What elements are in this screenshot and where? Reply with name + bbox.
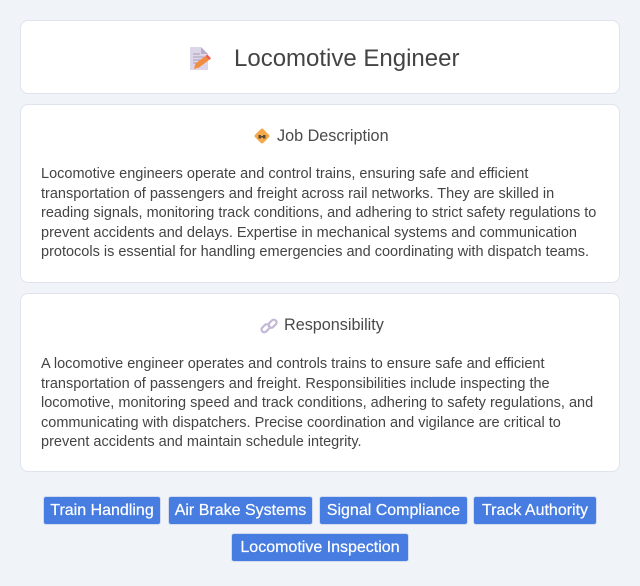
- text block: responsibility: transportation of passengers and freight. Responsibilities include inspecting the: [41, 376, 550, 392]
- heading: job description: Job Description: [277, 127, 389, 145]
- title: Locomotive Engineer: [234, 45, 459, 72]
- tag: locomotive inspection: Locomotive Inspection: [240, 539, 400, 556]
- text block: job description: transportation of passengers and freight across rail networks. They are skilled in: [41, 186, 554, 202]
- text block: job description: reading signals, monitoring track conditions, and adhering to strict safety regulations to: [41, 205, 596, 221]
- text block: responsibility: prevent accidents and maintain schedule integrity.: [41, 434, 362, 450]
- tag: train handling: Train Handling: [50, 502, 154, 519]
- text block: responsibility: A locomotive engineer operates and controls trains to ensure safe and efficient: [41, 356, 545, 372]
- text block: job description: Locomotive engineers operate and control trains, ensuring safe and efficient: [41, 166, 528, 182]
- text block: job description: prevent accidents and delays. Expertise in mechanical systems and communication: [41, 224, 577, 240]
- icon: chain link: [260, 318, 278, 334]
- tag: signal compliance: [319, 496, 468, 525]
- text block: job description: protocols is essential for handling emergencies and coordinating with dispatch teams.: [41, 244, 589, 260]
- heading: responsibility: Responsibility: [284, 316, 384, 334]
- tag group: skills: [43, 496, 597, 562]
- tag: train handling: [43, 496, 161, 525]
- icon: diamond sign: [254, 128, 270, 144]
- panel: responsibility: [20, 293, 620, 472]
- text block: responsibility: communicating with dispatchers. Precise coordination and vigilance are critical to: [41, 414, 561, 430]
- text block: responsibility: [41, 356, 593, 450]
- text block: responsibility: locomotive, monitoring speed and track conditions, adhering to safety regulations, and: [41, 395, 593, 411]
- tag: track authority: Track Authority: [482, 502, 588, 519]
- text block: job description: [41, 166, 596, 260]
- tag: track authority: [473, 496, 597, 525]
- tag: locomotive inspection: [231, 533, 409, 562]
- tag: air brake systems: [168, 496, 313, 525]
- tag: air brake systems: Air Brake Systems: [175, 502, 306, 519]
- panel: title card: [20, 20, 620, 94]
- panel: job description: [20, 104, 620, 283]
- tag: signal compliance: Signal Compliance: [327, 502, 460, 519]
- icon: document with pencil: [190, 47, 211, 70]
